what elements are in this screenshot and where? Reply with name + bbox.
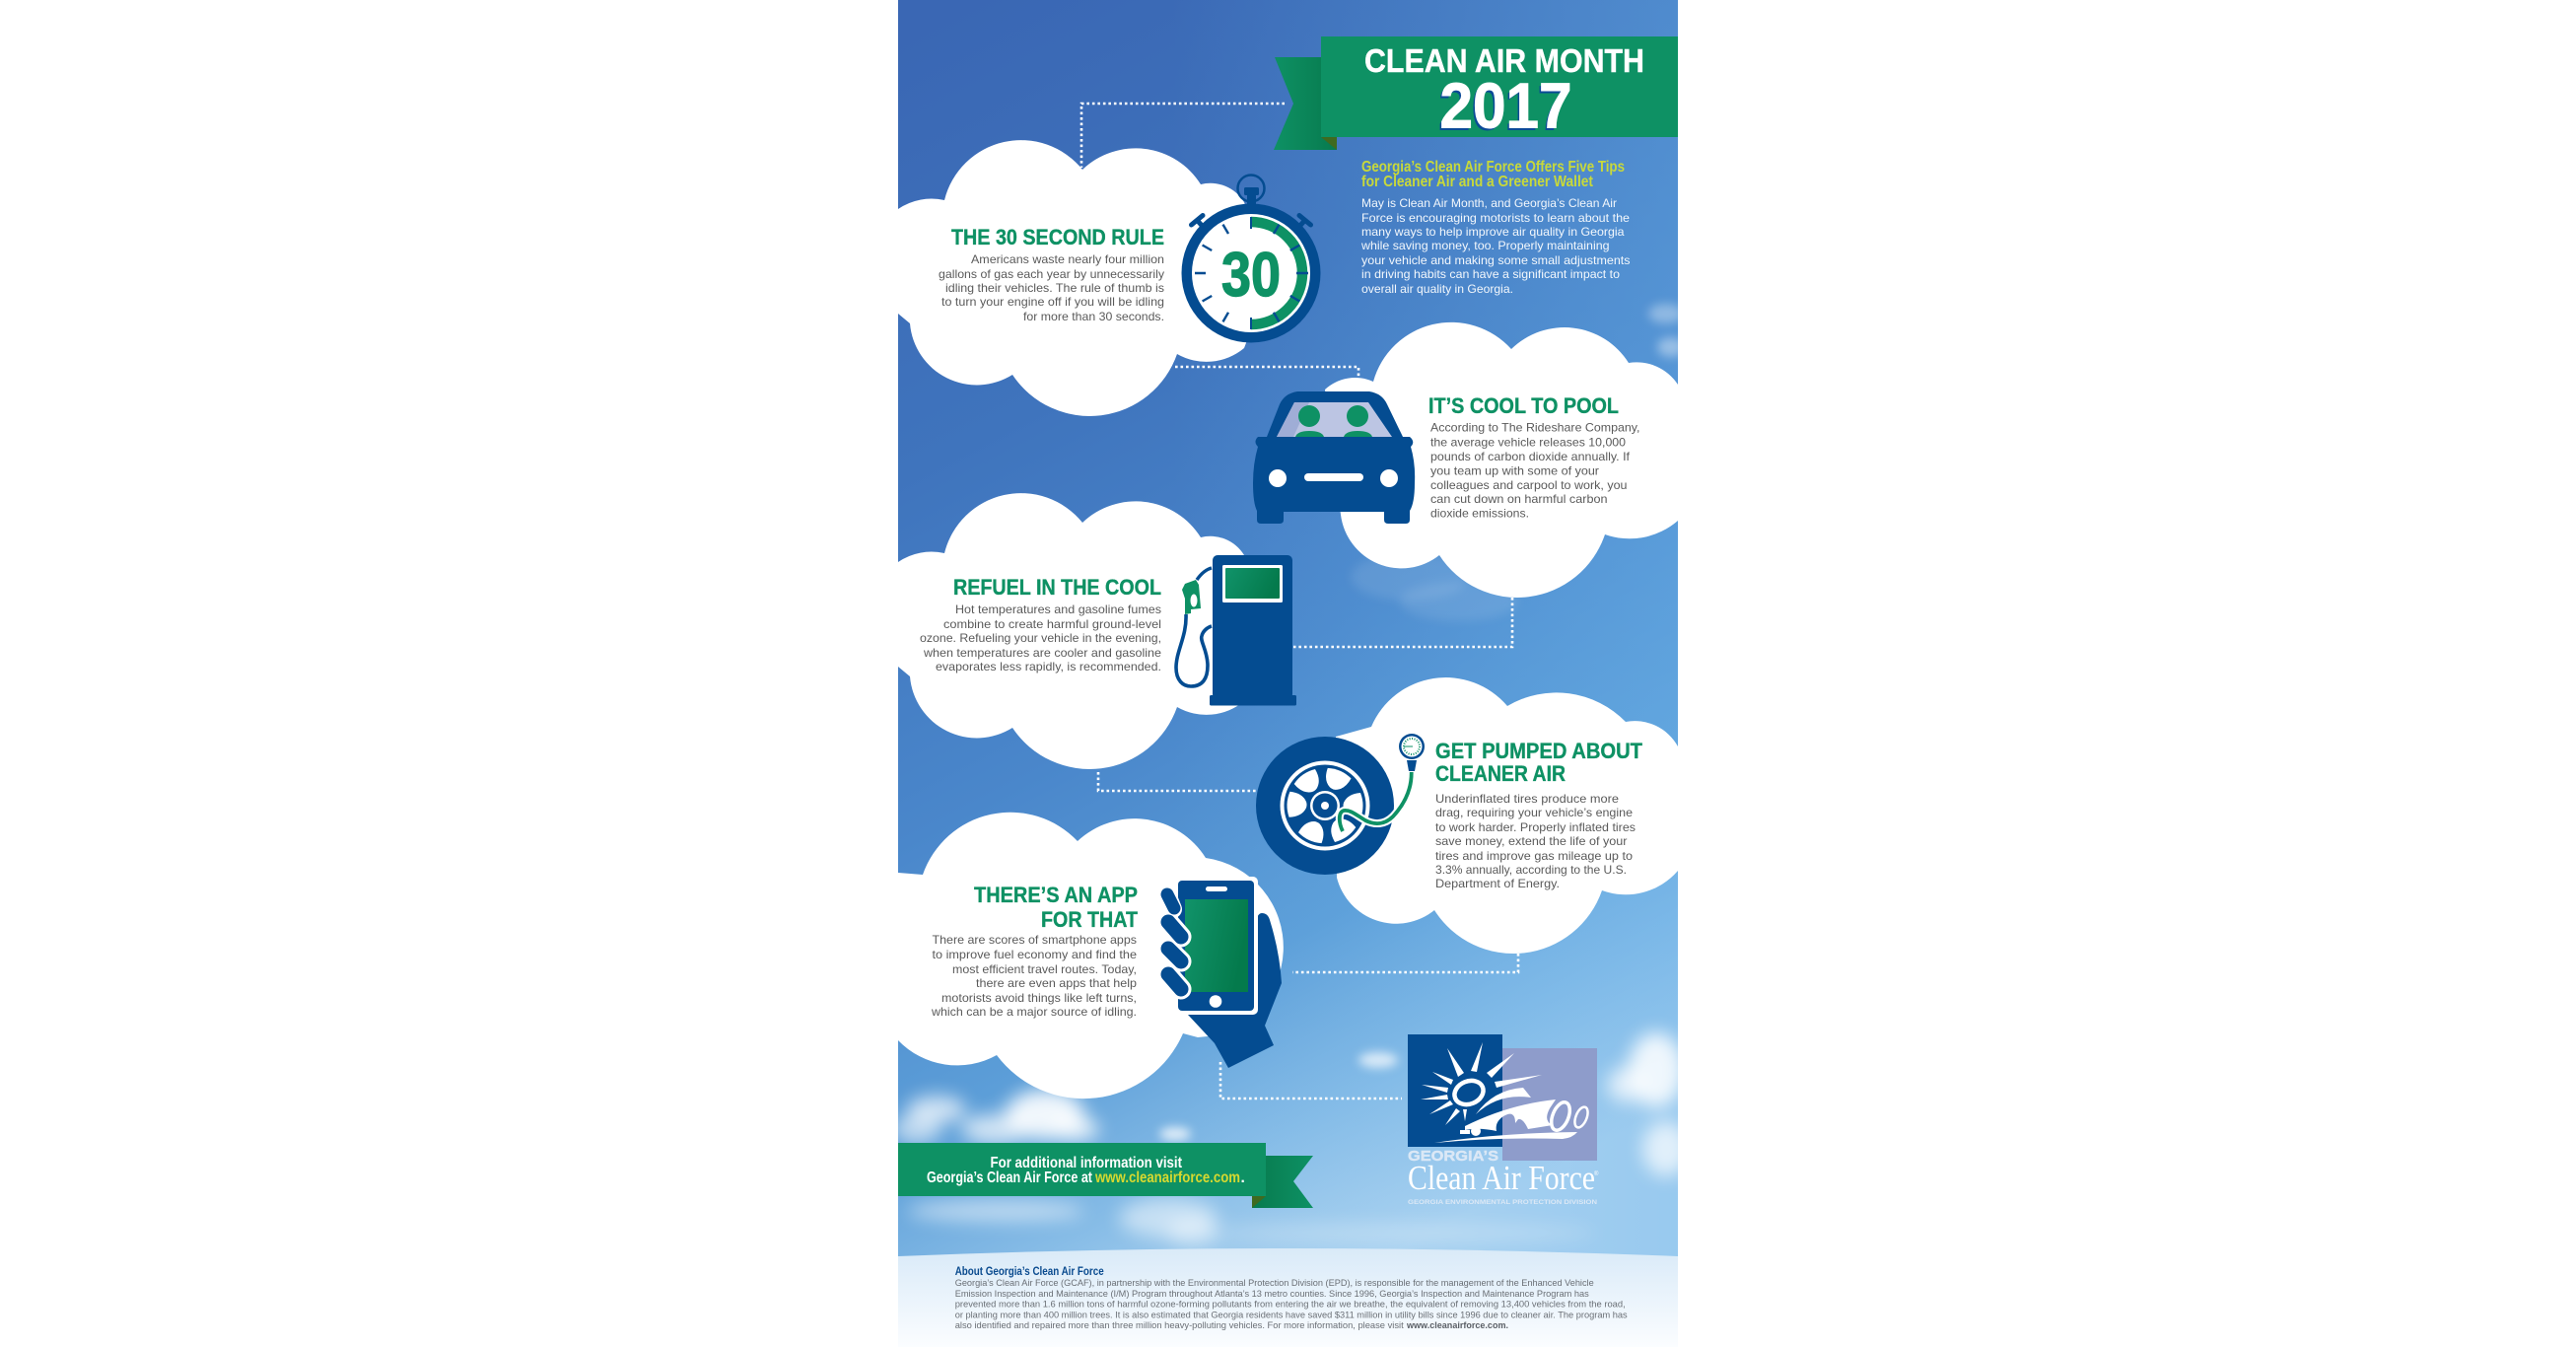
intro block: for Cleaner Air and a Greener Wallet xyxy=(1361,174,1593,190)
cloud: refuel in the cool xyxy=(898,493,1272,769)
cloud: 30 second rule xyxy=(898,140,1272,416)
text: refuel in the cool xyxy=(920,575,1161,674)
title ribbon xyxy=(1274,36,1678,150)
text: get pumped: 3.3% annually, according to the U.S. xyxy=(1435,863,1627,877)
text: there's an app: motorists avoid things like left turns, xyxy=(941,991,1137,1005)
body: Hot temperatures and gasoline fumes xyxy=(955,603,1161,616)
text: cool to pool: pounds of carbon dioxide annually. If xyxy=(1430,450,1631,463)
intro body: May is Clean Air Month, and Georgia’s Clean Air xyxy=(1361,196,1617,210)
ribbon: additional information: . xyxy=(1240,1170,1245,1186)
text: cool to pool: you team up with some of your xyxy=(1430,463,1599,477)
body: According to The Rideshare Company, xyxy=(1430,420,1640,434)
footer: about text: www.cleanairforce.com. xyxy=(1406,1319,1508,1330)
connector: stopwatch cloud to car cloud xyxy=(1175,365,1360,377)
heading: IT’S COOL TO POOL xyxy=(1428,393,1619,418)
text: refuel in the cool: when temperatures are cooler and gasoline xyxy=(923,646,1161,660)
text: cool to pool: can cut down on harmful carbon xyxy=(1430,492,1607,506)
text: cool to pool xyxy=(1428,393,1640,521)
logo: Georgia's Clean Air Force: GEORGIA ENVIRONMENTAL PROTECTION DIVISION xyxy=(1408,1199,1597,1206)
cloud: cool to pool xyxy=(1325,322,1678,598)
heading: GET PUMPED ABOUT xyxy=(1435,739,1643,763)
body: Underinflated tires produce more xyxy=(1435,792,1619,806)
dome: footer ground xyxy=(898,1248,1678,1347)
connector: tire cloud to phone xyxy=(1292,954,1518,972)
connector: phone to logo xyxy=(1220,1062,1402,1099)
title text: CLEAN AIR MONTH xyxy=(1364,42,1644,79)
logo sun xyxy=(1421,1042,1542,1125)
text: the 30 second rule: to turn your engine off if you will be idling xyxy=(941,295,1164,309)
heading: REFUEL IN THE COOL xyxy=(953,575,1161,600)
text: there's an app: to improve fuel economy and find the xyxy=(933,948,1137,961)
footer: about text: Emission Inspection and Maintenance (I/M) Program throughout Atlanta’s 13 metro counties. Since 1996, Georgia’s Inspection and Maintenance Program has xyxy=(955,1288,1589,1299)
footer: about text: or planting more than 400 million trees. It is also estimated that Georgia residents have saved $311 million in utility bills since 1996 due to cleaner air. The program has xyxy=(955,1310,1628,1319)
ribbon: additional information xyxy=(898,1143,1313,1208)
text: refuel in the cool: ozone. Refueling your vehicle in the evening, xyxy=(920,631,1161,645)
text: get pumped: to work harder. Properly inflated tires xyxy=(1435,820,1636,834)
text: there's an app xyxy=(931,883,1138,1019)
text: the 30 second rule: idling their vehicles. The rule of thumb is xyxy=(945,281,1164,295)
text: get pumped: Department of Energy. xyxy=(1435,877,1560,890)
text: the 30 second rule: for more than 30 seconds. xyxy=(1023,310,1164,323)
intro block: in driving habits can have a significant impact to xyxy=(1361,267,1620,281)
logo wordmark: GEORGIA’S xyxy=(1408,1148,1498,1165)
text: refuel in the cool: evaporates less rapidly, is recommended. xyxy=(936,660,1161,674)
logo: Georgia's Clean Air Force: ® xyxy=(1594,1170,1599,1177)
year: 2017 xyxy=(1439,69,1571,142)
footer: about text: also identified and repaired more than three million heavy-polluting vehicles. For more information, please visit xyxy=(955,1319,1404,1330)
sky background xyxy=(892,0,1690,1347)
intro block: overall air quality in Georgia. xyxy=(1361,282,1513,296)
text: there's an app: which can be a major source of idling. xyxy=(931,1005,1137,1019)
text: there's an app: FOR THAT xyxy=(1041,907,1138,932)
icon: car xyxy=(1253,391,1415,524)
text: the 30 second rule xyxy=(939,225,1164,323)
intro block: Force is encouraging motorists to learn about the xyxy=(1361,211,1630,225)
text: get pumped: save money, extend the life of your xyxy=(1435,834,1627,848)
footer body: Georgia’s Clean Air Force (GCAF), in partnership with the Environmental Protection Division (EPD), is responsible for the management of the Enhanced Vehicle xyxy=(955,1277,1594,1288)
text: cool to pool: colleagues and carpool to work, you xyxy=(1430,478,1627,492)
cloud: there's an app xyxy=(898,813,1284,1099)
text: there's an app: there are even apps that help xyxy=(976,976,1137,990)
heading: THERE’S AN APP xyxy=(974,883,1138,907)
infographic poster xyxy=(898,0,1678,1335)
intro block: while saving money, too. Properly maintaining xyxy=(1360,239,1609,252)
connector: title to stopwatch cloud xyxy=(1081,104,1285,168)
connector: pump cloud to tire xyxy=(1098,772,1258,791)
logo: Georgia's Clean Air Force: Clean Air Force xyxy=(1408,1159,1595,1197)
intro heading: Georgia’s Clean Air Force Offers Five Tips xyxy=(1361,159,1625,176)
text: cool to pool: dioxide emissions. xyxy=(1430,507,1529,521)
text: the 30 second rule: gallons of gas each year by unnecessarily xyxy=(939,267,1164,281)
text: refuel in the cool: combine to create harmful ground-level xyxy=(943,617,1161,631)
footer: about text: prevented more than 1.6 million tons of harmful ozone-forming pollutants from entering the air we breathe, the equivalent of removing 13,400 vehicles from the road, xyxy=(955,1298,1626,1310)
icon: hand holding phone xyxy=(1167,877,1282,1068)
body: Americans waste nearly four million xyxy=(971,252,1164,266)
text: there's an app: most efficient travel routes. Today, xyxy=(952,962,1137,976)
stopwatch number: 30 xyxy=(1221,241,1281,310)
footer heading: About Georgia’s Clean Air Force xyxy=(955,1266,1104,1278)
intro block: your vehicle and making some small adjustments xyxy=(1361,253,1631,267)
icon: tire with pressure gauge xyxy=(1256,734,1425,875)
intro block xyxy=(1360,159,1631,296)
text: get pumped: tires and improve gas mileage up to xyxy=(1435,849,1633,863)
text: get pumped xyxy=(1435,739,1643,890)
ribbon text: For additional information visit xyxy=(990,1155,1182,1171)
ribbon: additional information: www.cleanairforce.com xyxy=(1094,1170,1240,1186)
heading: THE 30 SECOND RULE xyxy=(951,225,1164,249)
body: There are scores of smartphone apps xyxy=(933,933,1137,947)
cloud: get pumped xyxy=(1336,677,1678,954)
text: get pumped: CLEANER AIR xyxy=(1435,761,1566,786)
icon: fuel pump xyxy=(1176,555,1296,706)
connector: car cloud to pump xyxy=(1293,598,1512,647)
logo car xyxy=(1434,1088,1590,1143)
year shadow: 2017 xyxy=(1437,72,1569,144)
footer: about text xyxy=(955,1266,1628,1330)
logo: Georgia's Clean Air Force xyxy=(1408,1034,1599,1206)
icon: stopwatch xyxy=(1181,176,1321,343)
text: cool to pool: the average vehicle releases 10,000 xyxy=(1430,436,1626,450)
text: get pumped: drag, requiring your vehicle’s engine xyxy=(1435,806,1633,819)
intro block: many ways to help improve air quality in Georgia xyxy=(1361,225,1625,239)
ribbon: additional information: Georgia’s Clean Air Force at xyxy=(927,1170,1092,1186)
